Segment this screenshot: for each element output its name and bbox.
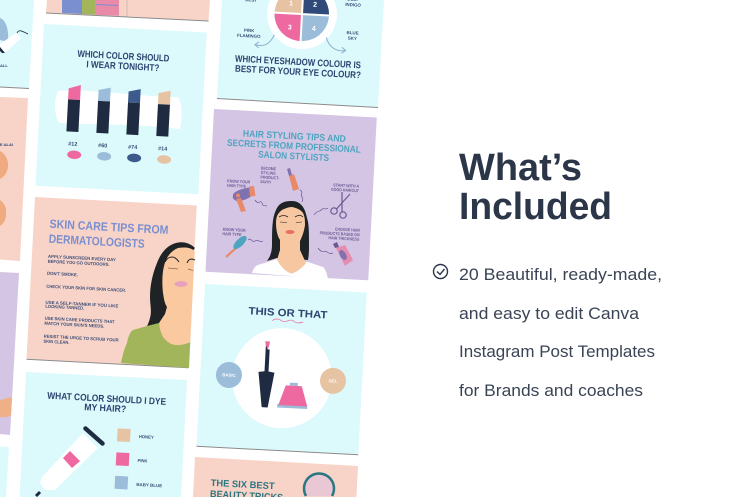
eyeshadow shade labels	[237, 0, 362, 44]
panel: partial left purple card	[0, 272, 19, 435]
skin care tips: RESIST THE URGE TO SCRUB YOUR	[44, 334, 120, 343]
panel: skin care card	[26, 197, 197, 368]
eyeshadow palette: 3	[288, 24, 292, 32]
eyeshadow palette: 4	[312, 26, 316, 33]
shade labels: #60	[98, 143, 107, 149]
body text	[459, 265, 662, 400]
hair styling title: SECRETS FROM PROFESSIONAL	[227, 138, 361, 156]
icon: check circle	[434, 264, 448, 278]
icon: spray bottle	[333, 242, 353, 266]
icon: nail polish bottle	[277, 382, 308, 409]
lipstick card title	[77, 49, 170, 75]
skin care title	[48, 217, 169, 252]
skin care tips: CHECK YOUR SKIN FOR SKIN CANCER.	[46, 284, 126, 293]
skin care tips: SKIN CLEAN.	[43, 339, 70, 345]
colour labels	[136, 434, 165, 488]
white circle	[229, 326, 335, 431]
panel: eyeshadow card	[217, 0, 384, 108]
shade labels: #12	[68, 141, 77, 148]
eyeshadow shade labels: SKY	[348, 36, 357, 41]
skin care tips: APPLY SUNSCREEN EVERY DAY	[48, 254, 116, 262]
shade labels	[68, 141, 168, 153]
hair styling labels: KNOW YOUR	[227, 178, 250, 184]
eyeshadow title	[234, 54, 362, 81]
eyeshadow shade labels: FLAMINGO	[237, 33, 261, 39]
icon: nail polish brush	[257, 341, 276, 408]
icon: brush	[226, 234, 249, 257]
this or that title: THIS OR THAT	[248, 305, 328, 321]
eyeshadow shade labels: INDIGO	[345, 2, 362, 8]
skin care tips: LOOKING TANNED.	[45, 304, 84, 311]
panel: partial bottom-left cyan card	[0, 446, 9, 497]
skin care tips: USE A SELF-TANNER IF YOU LIKE	[45, 300, 119, 309]
hair styling labels: HAIR TYPE	[222, 231, 242, 237]
white band behind lipsticks	[54, 89, 183, 129]
body text: for Brands and coaches	[459, 381, 643, 400]
heading: Included	[459, 186, 612, 228]
shade labels: #74	[128, 145, 138, 151]
woman portrait	[121, 242, 195, 368]
skin care tips: USE SKIN CARE PRODUCTS THAT	[45, 316, 115, 324]
eyeshadow palette: 2	[313, 2, 317, 9]
panel: partial left peach card: E ALAI	[0, 142, 13, 147]
hair styling title: SALON STYLISTS	[258, 149, 329, 164]
shade swatches	[67, 150, 171, 164]
woman portrait	[252, 201, 328, 279]
lipstick card title: WHICH COLOR SHOULD	[77, 49, 170, 65]
hair dye tube	[36, 428, 102, 496]
skin care title: DERMATOLOGISTS	[48, 232, 145, 251]
eyeshadow shade labels: BLUE	[347, 30, 359, 36]
basic option	[215, 361, 243, 389]
hair styling labels: BECOME	[261, 166, 276, 171]
colour labels: PINK	[137, 458, 148, 464]
skin care title: SKIN CARE TIPS FROM	[49, 217, 169, 237]
skin care tips: DON'T SMOKE.	[47, 271, 78, 277]
body text: Instagram Post Templates	[459, 342, 655, 361]
panel: lipstick card	[36, 24, 207, 194]
round mirror	[304, 474, 334, 496]
panel: hair styling card	[205, 109, 377, 280]
colour labels: HONEY	[139, 434, 154, 440]
title squiggle	[272, 319, 303, 323]
hair styling labels	[222, 164, 363, 243]
icon: styling bottle	[287, 168, 299, 191]
panel: six best beauty tricks card	[193, 457, 358, 497]
eyeshadow palette	[265, 0, 339, 51]
squiggle arrows	[248, 190, 333, 254]
shade labels: #14	[158, 146, 168, 153]
hair styling labels: KNOW YOUR	[223, 227, 246, 233]
colour labels: BABY BLUE	[136, 482, 162, 488]
panel: partial left peach card	[0, 97, 28, 261]
icon: scissors	[331, 192, 350, 218]
hair styling labels: GOOD HAIRCUT	[331, 187, 359, 193]
hair styling labels: PRODUCT-	[260, 175, 280, 181]
hair styling title	[226, 128, 362, 166]
hair styling labels: SAVVY	[260, 179, 272, 185]
icon: hair dryer	[233, 186, 256, 212]
panel: partial top-left cyan card: ALL	[0, 63, 8, 68]
hair styling labels: HAIR TYPE	[227, 183, 246, 189]
body text: 20 Beautiful, ready-made,	[459, 265, 662, 284]
hair styling labels: PRODUCTS BASED ON	[320, 230, 360, 237]
hair colour title: MY HAIR?	[84, 402, 127, 415]
panel: partial top-left cyan card	[0, 0, 34, 89]
basic option: BASIC	[222, 372, 236, 378]
panel: this or that card	[196, 284, 367, 455]
panel: partial top-middle card	[46, 0, 210, 22]
gel option: GEL	[328, 378, 338, 384]
body text: and easy to edit Canva	[459, 304, 640, 323]
eyeshadow shade labels: PINK	[244, 28, 255, 33]
eyeshadow title: BEST FOR YOUR EYE COLOUR?	[235, 64, 361, 81]
eyeshadow palette: 1	[289, 0, 293, 8]
colour swatches	[115, 428, 131, 489]
hair colour title	[46, 391, 166, 417]
heading	[459, 147, 612, 228]
hair colour title: WHAT COLOR SHOULD I DYE	[47, 391, 166, 408]
six best title: THE SIX BEST	[210, 478, 275, 492]
heading: What’s	[459, 147, 582, 189]
hair styling labels: CHOOSE HAIR	[335, 226, 360, 233]
hair styling labels: HAIR THICKNESS	[328, 235, 360, 242]
six best title	[210, 478, 283, 497]
curved arrows	[255, 34, 346, 53]
hair styling title: HAIR STYLING TIPS AND	[243, 129, 346, 145]
lipstick row	[66, 84, 171, 137]
hair styling labels: STYLING	[261, 170, 276, 176]
hair styling labels: START WITH A	[333, 182, 359, 189]
skin care tips: MATCH YOUR SKIN'S NEEDS.	[44, 321, 104, 329]
gel option	[319, 367, 347, 394]
skin care tips	[43, 254, 128, 348]
lipstick card title: I WEAR TONIGHT?	[86, 59, 160, 74]
panel: hair colour card	[20, 372, 187, 497]
eyeshadow title: WHICH EYESHADOW COLOUR IS	[235, 54, 361, 71]
skin care tips: BEFORE YOU GO OUTDOORS.	[48, 259, 110, 267]
